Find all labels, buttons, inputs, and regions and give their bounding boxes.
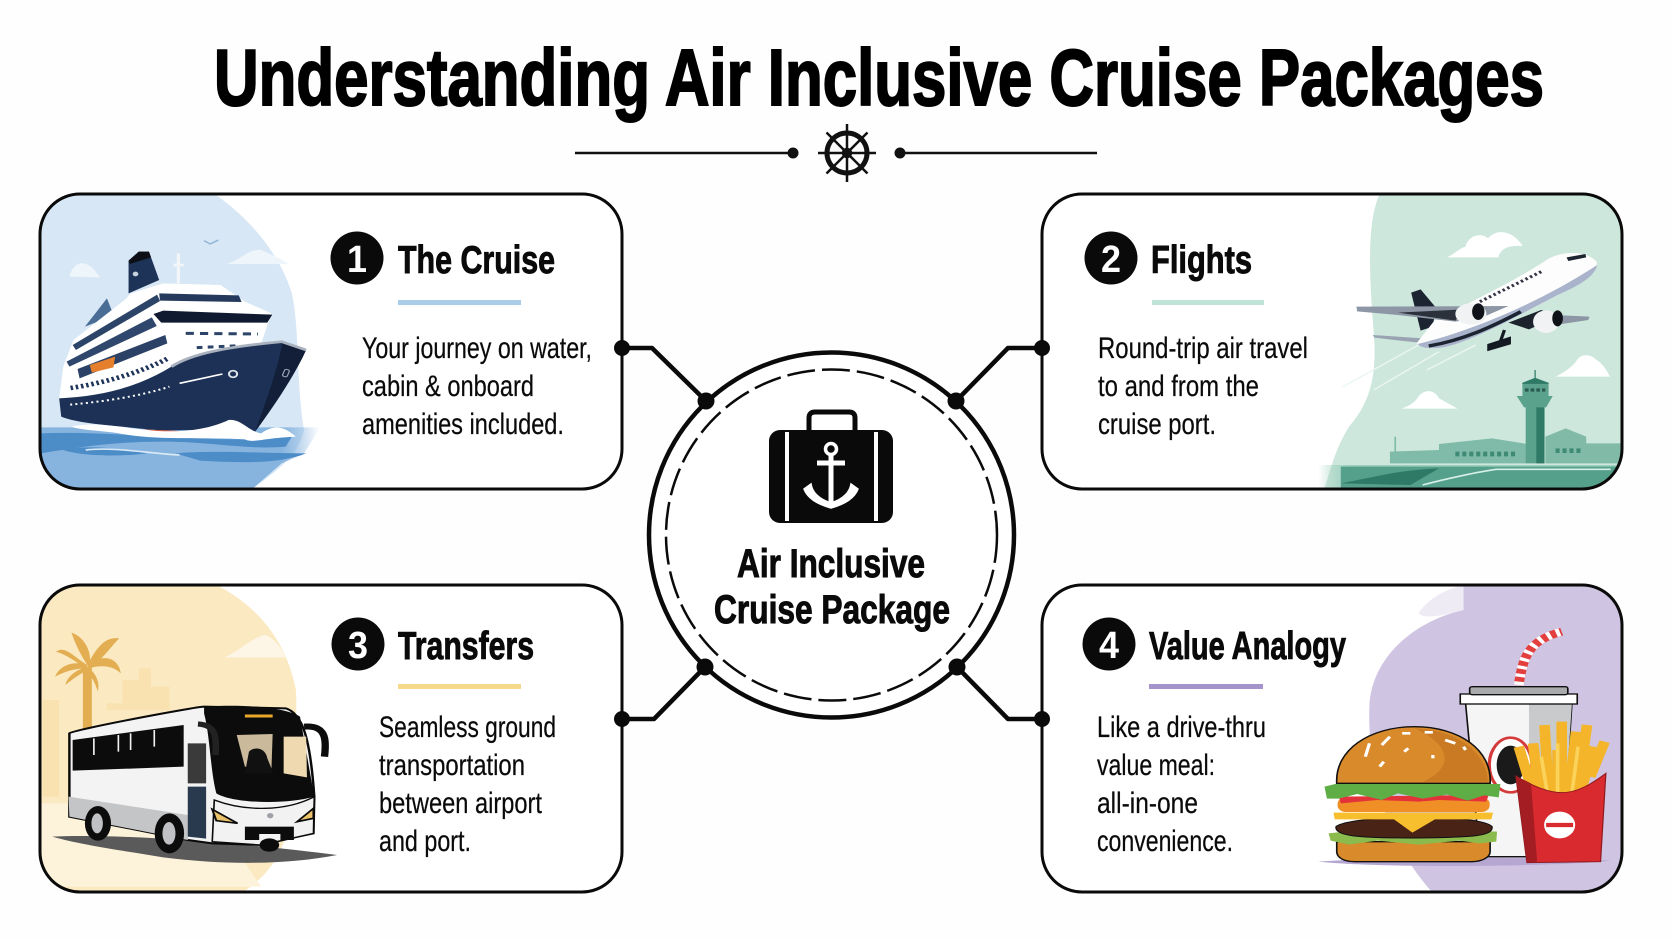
connector node [1034, 711, 1050, 727]
illustration: cruise ship at sea [40, 194, 320, 488]
panel: Value Analogy [1034, 585, 1623, 892]
connector node [614, 340, 630, 356]
icon: suitcase with anchor [769, 412, 893, 523]
body text [1098, 332, 1308, 441]
panel: The Cruise [40, 194, 630, 489]
body text: Round-trip air travel [1098, 332, 1308, 365]
illustration: coach bus with palm [40, 585, 337, 891]
illustration: burger, drink and fries [1318, 585, 1623, 891]
heading underline [1149, 684, 1263, 689]
panel: Flights [1034, 194, 1623, 489]
heading underline [1152, 300, 1264, 305]
number badge 3 [332, 618, 384, 670]
number badge 3: 3 [348, 625, 368, 667]
title divider with ship wheel [575, 124, 1097, 182]
number badge 1: 1 [347, 239, 367, 281]
illustration: airplane and airport [1318, 194, 1623, 488]
body text: and port. [379, 825, 471, 858]
heading underline [398, 684, 521, 689]
connectors between cards and hub [622, 348, 1042, 719]
card border [1042, 194, 1622, 489]
body text: convenience. [1097, 825, 1233, 858]
hub label [714, 542, 950, 632]
body text: Your journey on water, [362, 332, 592, 365]
heading: Transfers: Transfers [398, 625, 534, 668]
body text: amenities included. [362, 408, 564, 441]
body text: all-in-one [1097, 787, 1198, 820]
body text: between airport [379, 787, 543, 820]
number badge 2 [1084, 232, 1138, 284]
heading: Value Analogy: Value Analogy [1149, 625, 1346, 668]
body text: cabin & onboard [362, 370, 534, 403]
hub label: Cruise Package [714, 588, 950, 632]
card border [40, 585, 622, 892]
number badge 2: 2 [1101, 239, 1121, 281]
body text [362, 332, 592, 441]
hub: Air Inclusive Cruise Package [649, 352, 1014, 718]
heading: The Cruise: The Cruise [398, 239, 555, 282]
body text: cruise port. [1098, 408, 1216, 441]
number badge 1 [330, 232, 384, 284]
heading: Flights: Flights [1151, 239, 1252, 282]
heading underline [398, 300, 521, 305]
body text: transportation [379, 749, 525, 782]
body text: to and from the [1098, 370, 1259, 403]
body text: value meal: [1097, 749, 1215, 782]
body text [1097, 711, 1266, 858]
panel: Transfers [40, 585, 630, 892]
number badge 4 [1082, 618, 1136, 670]
connector node [614, 711, 630, 727]
card border [1042, 585, 1622, 892]
card border [40, 194, 622, 489]
body text: Seamless ground [379, 711, 556, 744]
body text: Like a drive-thru [1097, 711, 1266, 744]
connector node [1034, 340, 1050, 356]
body text [379, 711, 556, 858]
hub label: Air Inclusive [737, 542, 925, 586]
number badge 4: 4 [1099, 625, 1119, 667]
